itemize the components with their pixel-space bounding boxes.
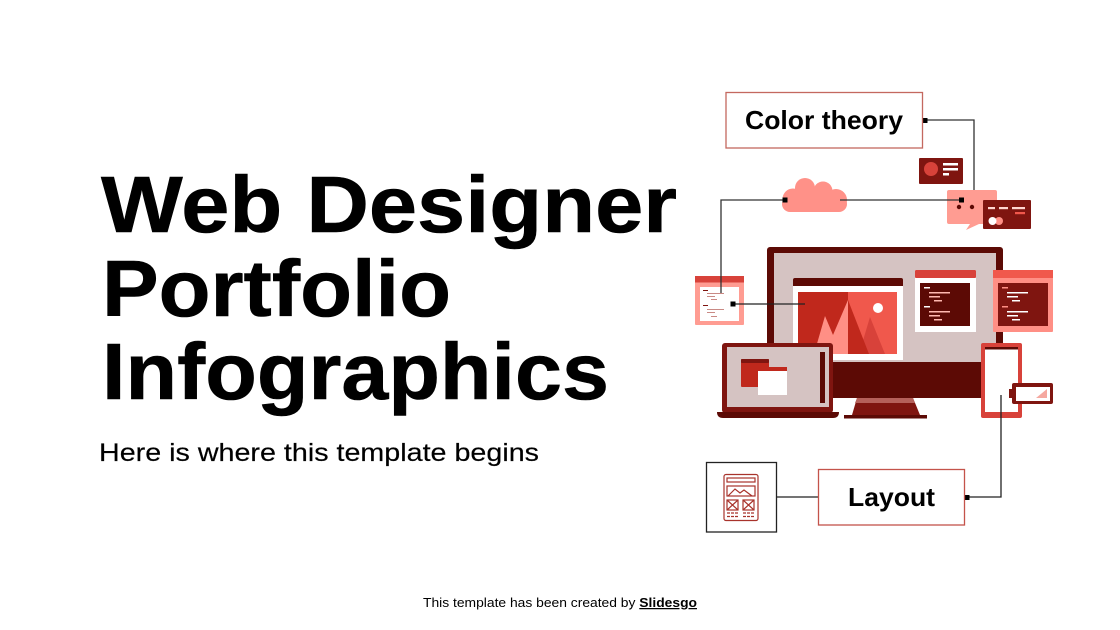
connector: left window to image — [733, 303, 805, 305]
cloud icon — [782, 178, 847, 212]
connector: layout to icon box — [777, 496, 818, 498]
icon: wireframe — [724, 474, 758, 520]
label: color theory — [726, 92, 922, 148]
left code window — [695, 276, 744, 325]
code window on monitor — [915, 270, 976, 332]
chat bubble icon — [947, 190, 997, 230]
monitor stand — [844, 398, 927, 418]
title: Infographics — [102, 327, 609, 416]
title: Portfolio — [102, 244, 451, 333]
connector: cloud to left window — [721, 200, 785, 293]
label: color theory: Color theory — [745, 105, 904, 135]
monitor body — [767, 247, 1003, 398]
card icon top — [919, 158, 963, 184]
credit card icon — [983, 200, 1031, 229]
subtitle: Here is where this template begins — [99, 439, 539, 467]
title: Web Designer — [101, 160, 677, 249]
laptop — [717, 343, 839, 418]
battery icon — [1009, 383, 1053, 404]
title — [101, 160, 677, 416]
connector: phone to layout — [967, 395, 1001, 497]
label: layout: Layout — [848, 482, 935, 512]
code window right — [993, 270, 1053, 332]
icon box: wireframe layout — [706, 462, 776, 532]
monitor screen — [774, 253, 996, 362]
footer credit: This template has been created by Slidesgo — [423, 596, 697, 610]
connector end markers — [730, 118, 970, 500]
label: layout — [818, 470, 964, 525]
image window — [793, 278, 903, 360]
phone — [981, 343, 1022, 418]
monitor illustration — [767, 247, 1053, 418]
connector: cloud to bubble — [840, 199, 961, 201]
connector: color theory to bubble — [925, 120, 974, 190]
